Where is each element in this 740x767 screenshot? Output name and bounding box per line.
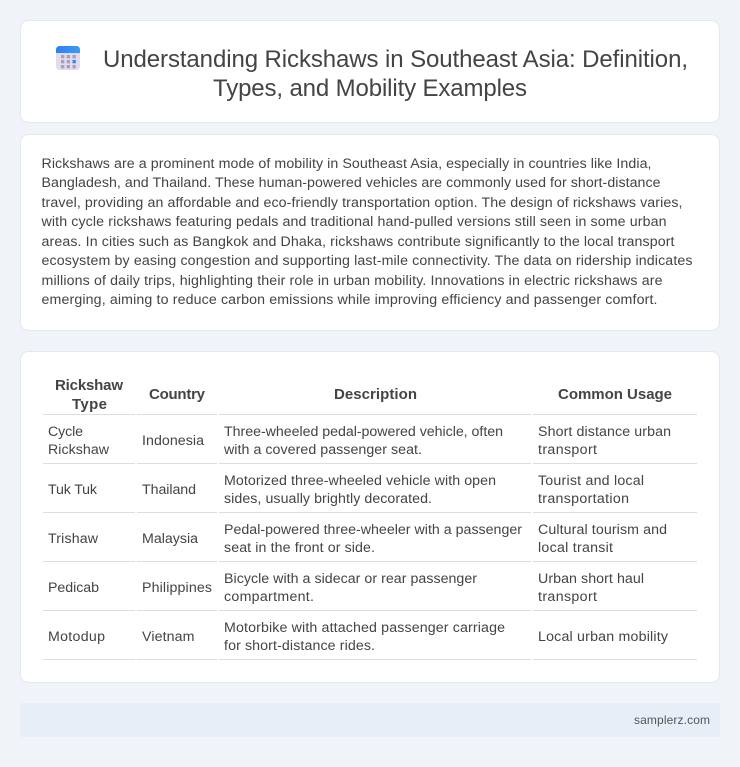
text block: introduction paragraph: Bangladesh, and Thailand. These human-powered vehicles are commonly used for short-distance xyxy=(42,175,661,191)
table row: Tuk Tuk: Motorized three-wheeled vehicle with open xyxy=(224,473,496,489)
table row: Tuk Tuk: transportation xyxy=(538,491,629,507)
table header row: Type xyxy=(72,396,107,413)
text block: introduction paragraph: Rickshaws are a prominent mode of mobility in Southeast Asia, especially in countries like India, xyxy=(42,156,652,172)
table header row: Common Usage xyxy=(558,386,672,403)
text block: introduction paragraph: areas. In cities such as Bangkok and Dhaka, rickshaws contribute significantly to the local transport xyxy=(42,234,675,250)
table row: Trishaw: Pedal-powered three-wheeler with a passenger xyxy=(224,522,522,538)
table row: Pedicab: transport xyxy=(538,589,597,605)
table row: Pedicab: compartment. xyxy=(224,589,314,605)
table header row: Description xyxy=(334,386,417,403)
table row: Tuk Tuk: Thailand xyxy=(142,482,196,498)
footer bar: samplerz.com xyxy=(634,713,710,727)
table row: Motodup: Motorbike with attached passenger carriage xyxy=(224,620,505,636)
table row: Cycle Rickshaw xyxy=(43,424,697,464)
panel: introduction xyxy=(20,134,720,330)
table row: Cycle Rickshaw: transport xyxy=(538,442,597,458)
table row: Trishaw: Trishaw xyxy=(48,531,99,547)
table row: Trishaw xyxy=(43,522,697,562)
title: Understanding Rickshaws in Southeast Asia: Definition, xyxy=(103,46,688,73)
table row: Pedicab: Pedicab xyxy=(48,580,99,596)
text block: introduction paragraph xyxy=(40,156,692,308)
table row: Tuk Tuk xyxy=(43,473,697,513)
table row: Pedicab: Bicycle with a sidecar or rear passenger xyxy=(224,571,477,587)
text block: introduction paragraph: with cycle rickshaws featuring pedals and traditional hand-pulled versions still seen in some urban xyxy=(40,214,666,230)
text block: introduction paragraph: millions of daily trips, highlighting their role in urban mobility. Innovations in electric rickshaws are xyxy=(42,273,663,289)
table row: Motodup: Motodup xyxy=(48,629,105,645)
panel: rickshaw types table xyxy=(20,352,720,682)
table row: Motodup: for short-distance rides. xyxy=(224,638,375,654)
icon: calendar xyxy=(56,46,80,70)
table row: Cycle Rickshaw: Indonesia xyxy=(142,433,204,449)
table row: Pedicab: Philippines xyxy=(142,580,212,596)
footer bar xyxy=(20,703,720,737)
table row: Cycle Rickshaw: Three-wheeled pedal-powered vehicle, often xyxy=(224,424,503,440)
title xyxy=(103,46,688,102)
table row: Pedicab xyxy=(43,571,697,611)
table row: Pedicab: Urban short haul xyxy=(538,571,644,587)
table row: Tuk Tuk: sides, usually brightly decorated. xyxy=(224,491,432,507)
table row: Trishaw: local transit xyxy=(538,540,613,556)
text block: introduction paragraph: ecosystem by easing congestion and supporting last-mile connectivity. The data on ridership indicates xyxy=(42,253,692,269)
table row: Motodup: Vietnam xyxy=(142,629,194,645)
table row: Tuk Tuk: Tourist and local xyxy=(538,473,644,489)
table row: Trishaw: Cultural tourism and xyxy=(538,522,667,538)
table row: Cycle Rickshaw: Rickshaw xyxy=(48,442,110,458)
panel: header xyxy=(20,20,720,122)
table header row: Rickshaw xyxy=(55,377,123,394)
table row: Trishaw: seat in the front or side. xyxy=(224,540,375,556)
table row: Cycle Rickshaw: with a covered passenger seat. xyxy=(223,442,422,458)
title: Types, and Mobility Examples xyxy=(213,75,527,102)
table row: Cycle Rickshaw: Short distance urban xyxy=(538,424,671,440)
text block: introduction paragraph: emerging, aiming to reduce carbon emissions while improving efficiency and passenger comfort. xyxy=(42,292,658,308)
table header row xyxy=(43,377,697,415)
table row: Cycle Rickshaw: Cycle xyxy=(48,424,83,440)
table header row: Country xyxy=(149,386,206,403)
table row: Motodup: Local urban mobility xyxy=(538,629,669,645)
text block: introduction paragraph: travel, providing an affordable and eco-friendly transportation option. The design of rickshaws varies, xyxy=(42,195,682,211)
table row: Trishaw: Malaysia xyxy=(142,531,198,547)
table row: Motodup xyxy=(43,620,697,660)
table row: Tuk Tuk: Tuk Tuk xyxy=(48,482,98,498)
